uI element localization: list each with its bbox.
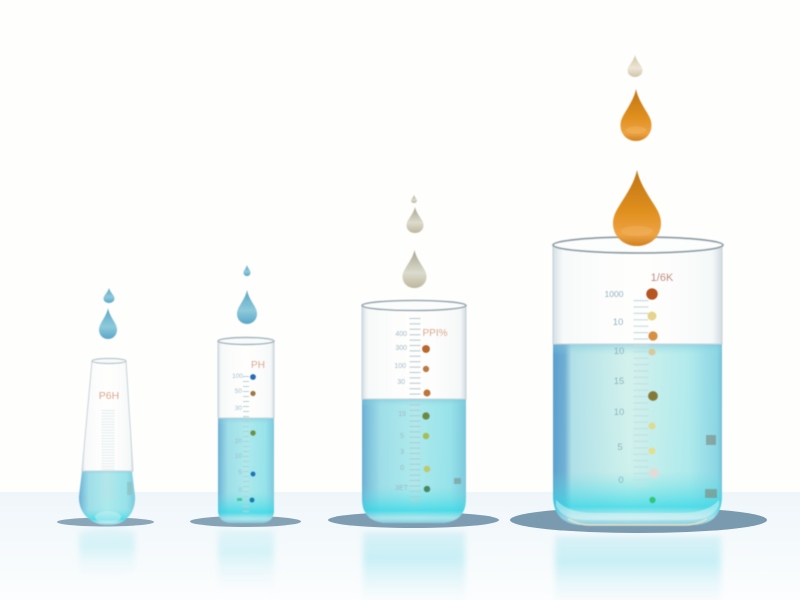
rim bbox=[553, 237, 723, 253]
water bbox=[553, 344, 722, 525]
glass bbox=[362, 305, 466, 399]
vessel 1: tapered tube bbox=[79, 358, 135, 525]
scale numbers bbox=[605, 289, 624, 486]
scale numbers: 20 bbox=[235, 438, 242, 445]
scale bbox=[102, 410, 114, 500]
specks bbox=[127, 482, 132, 495]
grey drops, vessel 3 bbox=[402, 195, 426, 288]
scale numbers: 30 bbox=[397, 379, 405, 386]
scale numbers: 5 bbox=[617, 442, 623, 453]
vessel 3: beaker bbox=[362, 300, 466, 523]
amber drops, vessel 4 bbox=[613, 55, 661, 246]
scale numbers: 10 bbox=[613, 317, 623, 328]
label: PH bbox=[251, 360, 265, 371]
reading dots bbox=[237, 374, 256, 503]
scale numbers: 400 bbox=[395, 331, 407, 338]
blue drops, vessel 2 bbox=[237, 265, 257, 324]
shadow: vessel 1 bbox=[57, 518, 154, 526]
rim bbox=[362, 300, 466, 310]
scale numbers: 10 bbox=[614, 407, 624, 418]
scale numbers: 15 bbox=[398, 411, 406, 418]
rim bbox=[218, 338, 274, 344]
scale bbox=[634, 300, 648, 492]
scale numbers: 0 bbox=[400, 465, 404, 472]
reflections of vessels bbox=[79, 528, 721, 600]
scale numbers: 100 bbox=[394, 363, 406, 370]
label: 1/6K bbox=[651, 272, 674, 284]
label: PPI% bbox=[422, 328, 448, 339]
scale numbers: 0 bbox=[618, 475, 624, 486]
scale numbers: 50 bbox=[235, 388, 242, 395]
shadow: vessel 2 bbox=[190, 516, 301, 527]
scale numbers bbox=[232, 373, 243, 494]
vessel 4: large beaker bbox=[553, 237, 723, 525]
specks bbox=[705, 435, 717, 498]
bottom band bbox=[556, 500, 719, 520]
scale numbers: 10 bbox=[235, 453, 242, 460]
water bbox=[362, 399, 466, 523]
water bbox=[218, 418, 274, 523]
scale numbers: 0 bbox=[238, 487, 242, 494]
glass bbox=[553, 245, 722, 344]
vessel 2: cylinder bbox=[218, 338, 274, 523]
scale numbers: 5 bbox=[400, 433, 404, 440]
reading dots bbox=[422, 345, 431, 492]
scale numbers: 10 bbox=[614, 346, 624, 357]
scale numbers: 3ET bbox=[395, 485, 409, 492]
floor surface bbox=[0, 492, 800, 600]
label: P6H bbox=[99, 390, 119, 402]
scale numbers: 1000 bbox=[605, 289, 624, 299]
shadow: vessel 3 bbox=[328, 512, 499, 528]
scale numbers bbox=[394, 331, 409, 492]
scale numbers: 3 bbox=[400, 449, 404, 456]
scale numbers: 100 bbox=[232, 373, 243, 380]
reading dots bbox=[646, 288, 659, 503]
glass bbox=[218, 341, 274, 418]
shadow: vessel 4 bbox=[510, 507, 767, 533]
scale numbers: 5 bbox=[238, 469, 242, 476]
scale numbers: 30 bbox=[235, 405, 242, 412]
water bbox=[79, 471, 135, 525]
blue drops, vessel 1 bbox=[99, 288, 117, 339]
glass bbox=[82, 361, 133, 471]
specks bbox=[454, 478, 461, 484]
base edge bbox=[568, 519, 707, 525]
scale numbers: 300 bbox=[395, 345, 407, 352]
scale bbox=[243, 376, 249, 512]
scale bbox=[410, 318, 420, 506]
rim bbox=[92, 358, 126, 364]
scale numbers: 15 bbox=[614, 376, 624, 387]
